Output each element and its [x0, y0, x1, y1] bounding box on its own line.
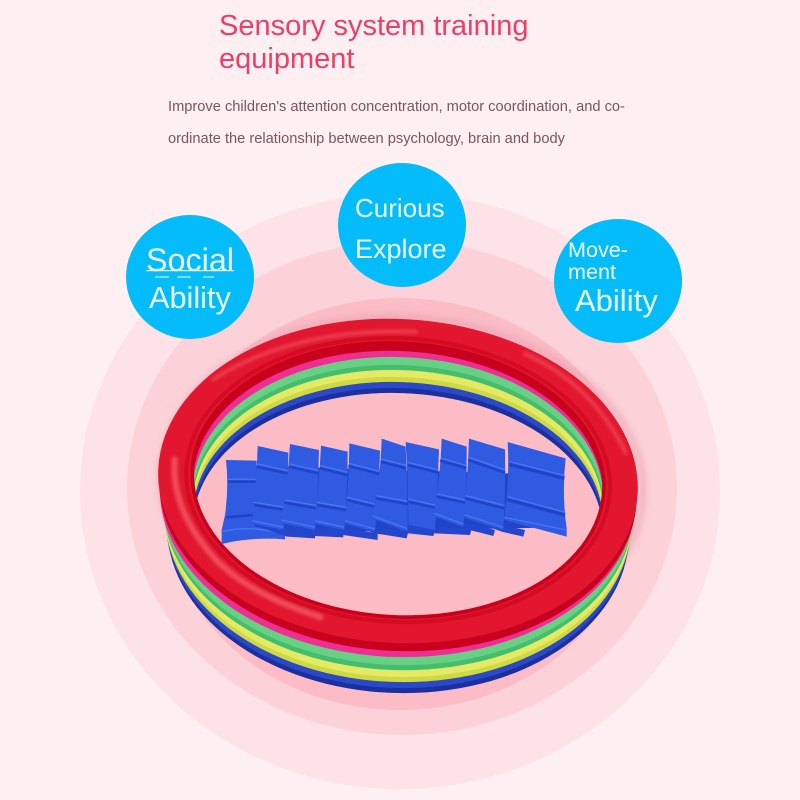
description text: Improve children's attention concentration, motor coordination, and co-	[168, 99, 625, 115]
bubble: Curious Explore: Curious	[355, 193, 445, 223]
clip backing	[235, 465, 558, 534]
soft shadow around hoops	[153, 306, 651, 662]
clip 4	[314, 446, 378, 540]
bubble: Social Ability: Ability	[149, 280, 232, 315]
clip 6	[372, 439, 435, 536]
clip 7	[406, 442, 472, 535]
bubble: Social Ability: Social	[146, 242, 234, 278]
blue connector clips	[222, 439, 567, 544]
clip 2	[252, 446, 315, 538]
title: Sensory system training	[219, 10, 528, 42]
bubble: Social Ability	[126, 215, 254, 339]
bubble: Curious Explore	[338, 163, 466, 287]
bubble: Curious Explore: Explore	[355, 234, 447, 264]
stack of coloured hoops	[150, 307, 646, 701]
clip 8	[433, 439, 495, 536]
clip 5	[344, 443, 408, 538]
clip 10	[504, 442, 567, 537]
red top hoop	[150, 307, 646, 655]
clip 3	[281, 444, 343, 537]
description text: ordinate the relationship between psychology, brain and body	[168, 131, 566, 147]
bubble: Movement Ability: Move-	[568, 237, 628, 262]
bubble: Movement Ability: ment	[568, 259, 616, 284]
bubble: Movement Ability: Ability	[575, 283, 658, 318]
clip 9	[463, 439, 525, 537]
bubble: Movement Ability	[554, 219, 682, 343]
concentric pink background circles	[80, 193, 720, 789]
title: equipment	[219, 43, 354, 75]
clip 1	[222, 460, 285, 544]
